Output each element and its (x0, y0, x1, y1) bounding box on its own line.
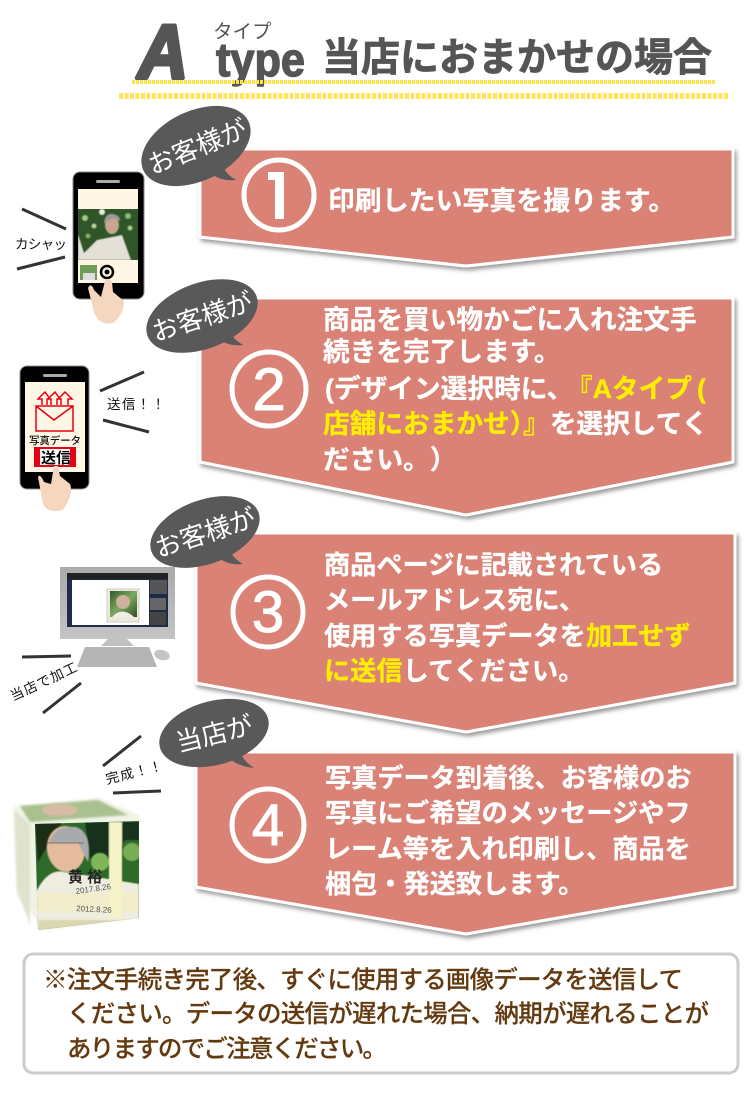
notice text: ください。データの送信が遅れた場合、納期が遅れることが (67, 999, 709, 1028)
arrow panel 4 (196, 752, 735, 934)
icon: computer (60, 567, 175, 667)
number 2: 2 (252, 356, 286, 423)
bubble: customer 3 (140, 482, 270, 582)
arrow panel 1 (200, 149, 733, 266)
icon: phone send (20, 366, 89, 511)
bubble: shop (152, 688, 276, 778)
red mail icon (36, 406, 73, 431)
notice text: ※注文手続き完了後、すぐに使用する画像データを送信して (43, 965, 683, 994)
icon: photo cube: 2017.8.26 (75, 882, 112, 896)
step 2 text: ださい。） (323, 445, 456, 475)
step 3 text (324, 550, 691, 686)
title (119, 10, 728, 96)
panel: step 4 (196, 752, 735, 934)
title word type: type (216, 33, 305, 86)
step 2 text: (デザイン選択時に、『Aタイプ( (325, 374, 706, 404)
step 3 text: 商品ページに記載されている (324, 550, 663, 580)
label: done: 完成！！ (104, 758, 164, 787)
icon: phone send: 写真データ (29, 434, 81, 447)
notice box (24, 954, 738, 1073)
label: done (103, 736, 164, 793)
arrow panel 2 (200, 298, 733, 515)
bubble: customer 1: お客様が (144, 114, 251, 180)
step 1 text: 印刷したい写真を撮ります。 (328, 186, 675, 216)
title katakana: タイプ (213, 21, 272, 43)
yellow underline lower (119, 93, 728, 99)
icon: photo cube: 黄 裕 (68, 868, 102, 886)
label: kasha: カシャッ (15, 237, 67, 252)
step 3 text: メールアドレス宛に、 (324, 585, 585, 615)
step 4 text: レーム等を入れ印刷し、商品を (325, 834, 691, 864)
label: send (100, 372, 165, 432)
step 2 text: 店舗におまかせ）』を選択してく (323, 409, 708, 439)
icon: photo cube (14, 798, 141, 932)
notice text: ありますのでご注意ください。 (67, 1035, 387, 1063)
panel: step 3 (196, 533, 735, 732)
notice text (43, 965, 709, 1063)
step 2 text (323, 305, 708, 475)
label: processing: 当店で加工 (8, 660, 80, 704)
number 1 (244, 160, 314, 230)
bubble: customer 2 (136, 265, 268, 367)
arrow panel 3 (196, 533, 735, 732)
step 4 text: 写真にご希望のメッセージやフ (325, 798, 691, 828)
label: kasha (15, 209, 67, 269)
step 4 text: 写真データ到着後、お客様のお (325, 763, 692, 793)
bubble: customer 1 (129, 90, 263, 202)
number 3: 3 (252, 580, 284, 645)
step 4 text: 梱包・発送致します。 (325, 869, 584, 899)
step 3 text: に送信してください。 (324, 656, 584, 686)
bubble: customer 2: お客様が (148, 287, 256, 347)
step 2 text: 続きを完了します。 (323, 337, 561, 367)
icon: photo cube: 2012.8.26 (76, 904, 112, 915)
bubble: customer 3: お客様が (151, 503, 259, 563)
bubble: shop: 当店が (173, 710, 256, 758)
title letter A: A (136, 10, 188, 95)
yellow underline upper (132, 80, 715, 84)
number 4: 4 (252, 793, 284, 858)
label: send: 送信！！ (107, 397, 165, 412)
number 4 (232, 789, 304, 861)
icon: phone send: 送信 (41, 450, 71, 467)
step 3 text: 使用する写真データを加工せず (324, 621, 691, 651)
step 4 text (325, 763, 692, 899)
icon: phone camera (73, 172, 144, 324)
number 3 (233, 577, 303, 647)
step 2 text: 商品を買い物かごに入れ注文手 (323, 305, 697, 335)
title heading: 当店におまかせの場合 (322, 37, 712, 80)
panel: step 1 (200, 149, 733, 266)
panel: step 2 (200, 298, 733, 515)
number 2 (232, 352, 306, 426)
